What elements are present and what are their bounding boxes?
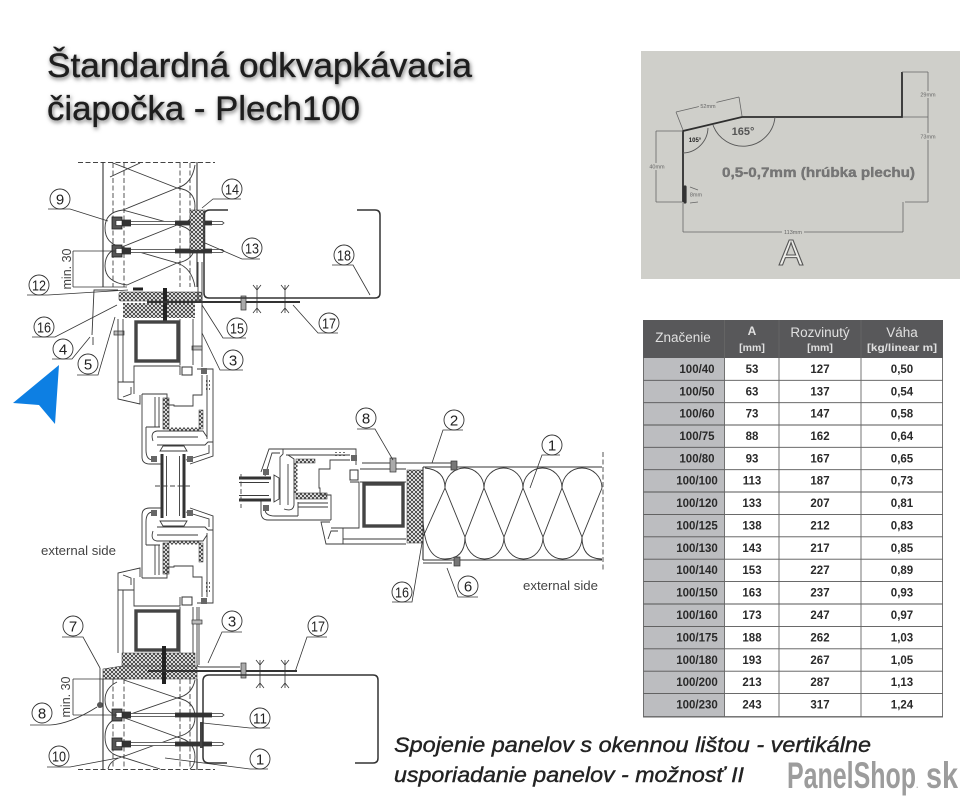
label 3: [202, 333, 243, 370]
label 10: [47, 746, 118, 767]
table rows: 100/175: [676, 632, 718, 644]
table rows: 0,64: [891, 431, 914, 443]
arrow: blue pointer: [13, 365, 59, 424]
table rows: 0,50: [891, 364, 913, 376]
dimension: lower min.30: [59, 676, 125, 718]
label 11: 11: [253, 710, 267, 728]
table rows: 247: [810, 610, 830, 622]
title: [47, 47, 472, 128]
table rows: 317: [810, 700, 830, 712]
dimension 113mm: 113mm: [784, 230, 802, 236]
table rows: 73: [746, 409, 758, 421]
table rows: 162: [810, 431, 830, 443]
technical drawing: horizontal section: [239, 408, 603, 602]
table rows: 0,73: [891, 476, 913, 488]
label 16: 16: [395, 584, 409, 602]
table rows: 100/50: [679, 386, 715, 398]
upper fasteners: [112, 217, 224, 257]
table rows: 100/230: [676, 700, 718, 712]
dimension 29mm: 29mm: [920, 92, 936, 98]
table rows: 100/200: [676, 677, 718, 689]
table rows: 138: [742, 520, 762, 532]
label 1: 1: [548, 438, 556, 454]
table rows: 0,81: [891, 498, 914, 510]
table rows: 1,05: [891, 655, 914, 667]
label 12: 12: [32, 278, 46, 294]
table rows: 0,89: [891, 565, 913, 577]
table rows: 262: [810, 632, 830, 644]
table rows: 188: [742, 632, 762, 644]
table rows: 100/160: [676, 610, 718, 622]
table rows: 100/125: [676, 520, 718, 532]
header labels: [kg/linear m]: [867, 342, 937, 354]
table rows: 53: [746, 364, 758, 376]
table rows: 237: [810, 588, 830, 600]
angle 105: 105°: [689, 138, 702, 144]
table rows: 217: [810, 543, 830, 555]
logo: PanelShop: [787, 755, 916, 796]
first column shading: [643, 358, 724, 717]
table rows: 100/150: [676, 588, 718, 600]
dimension 52mm text: 52mm: [700, 104, 716, 110]
label 7: 7: [69, 618, 77, 636]
label 15: 15: [230, 320, 244, 338]
table rows: 63: [746, 386, 758, 398]
label 18: 18: [337, 248, 351, 264]
table rows: 100/80: [679, 453, 715, 465]
label 8: [356, 408, 393, 460]
table rows: 113: [743, 476, 761, 488]
logo: sk: [926, 755, 958, 796]
dimension 40mm background: [648, 163, 666, 170]
label: external side right: external side: [523, 579, 598, 593]
label 17: 17: [322, 316, 336, 332]
label 17 lower: 17: [311, 618, 325, 636]
table rows: 1,03: [891, 632, 913, 644]
table rows: 0,83: [891, 520, 913, 532]
table rows: 1,13: [891, 677, 913, 689]
label 17 lower: [295, 616, 328, 672]
label 15: [202, 305, 247, 338]
title: Štandardná odkvapkávacia: [47, 47, 472, 85]
label 16: [392, 543, 422, 602]
dimension 40mm: 40mm: [649, 164, 665, 170]
header labels: A: [748, 324, 757, 338]
header labels: [mm]: [807, 342, 833, 354]
table rows: 212: [810, 520, 830, 532]
table rows: 267: [810, 655, 830, 667]
label 4: 4: [59, 342, 67, 358]
table rows: 287: [810, 677, 830, 689]
header labels: [655, 324, 937, 354]
glazing centre mark: [155, 485, 192, 487]
label 1 lower: 1: [256, 752, 264, 768]
technical drawing: vertical section: [27, 162, 380, 770]
dimension: upper min.30: min. 30: [60, 248, 74, 290]
label 1: [530, 435, 562, 488]
dimension 29mm background: [919, 91, 937, 98]
upper sealing strips: [119, 210, 205, 327]
table rows: 0,58: [891, 409, 914, 421]
angle 165: 165°: [732, 126, 754, 138]
lower flashing: [203, 675, 378, 763]
profile line: [683, 72, 902, 202]
upper window section: [118, 319, 213, 486]
table rows: 127: [810, 364, 830, 376]
letter A: A: [779, 232, 803, 273]
table rows: 133: [742, 498, 762, 510]
label 2: [432, 410, 464, 463]
dimension: upper min.30: [60, 248, 127, 290]
lower fasteners: [112, 709, 224, 750]
table rows: 100/130: [676, 543, 718, 555]
hatch seal: [407, 470, 423, 543]
label 7: [62, 616, 100, 668]
label 9: 9: [56, 192, 64, 208]
table rows: 0,93: [891, 588, 913, 600]
lower trim plates: [97, 607, 297, 708]
table rows: 0,85: [891, 543, 914, 555]
label 18: [332, 245, 370, 295]
label 17: [293, 305, 339, 333]
label 16: [32, 305, 117, 337]
label 3: 3: [229, 352, 237, 370]
lower window section: [118, 486, 213, 653]
label 13: 13: [245, 240, 259, 258]
table rows: 193: [742, 655, 762, 667]
dimension lines: [656, 72, 928, 232]
table rows: 173: [742, 610, 762, 622]
title: čiapočka - Plech100: [47, 90, 360, 128]
caption: usporiadanie panelov - možnosť II: [394, 764, 744, 787]
label 5: 5: [84, 356, 92, 374]
table rows: [676, 364, 914, 712]
table rows: 227: [810, 565, 830, 577]
dimension 52mm: [699, 101, 717, 111]
label 13: [205, 238, 262, 259]
label 3 lower: [208, 611, 242, 663]
label 16: 16: [37, 320, 51, 336]
logo: .: [916, 780, 919, 790]
trim plates: [362, 458, 460, 566]
table rows: 100/120: [676, 498, 718, 510]
label 8 lower: [30, 703, 97, 725]
label 11: [203, 708, 270, 728]
label 8: 8: [362, 410, 370, 428]
label: external side left: external side: [41, 544, 116, 558]
table rows: 143: [742, 543, 762, 555]
label 9: [48, 189, 108, 221]
label 8 lower: 8: [38, 706, 46, 722]
table rows: 100/40: [679, 364, 715, 376]
dimension 8mm: 8mm: [690, 192, 703, 198]
table rows: 0,65: [891, 453, 914, 465]
dimension 113mm background: [782, 229, 804, 235]
lower sealing strips: [103, 646, 197, 684]
header labels: Značenie: [655, 330, 711, 345]
header labels: Rozvinutý: [790, 325, 850, 340]
dimension 73mm background: [919, 133, 937, 140]
table rows: 100/140: [676, 565, 718, 577]
table rows: 207: [810, 498, 830, 510]
table rows: 137: [810, 386, 830, 398]
label 6: [447, 568, 478, 597]
label 14: 14: [225, 182, 239, 198]
table: dimensions: [643, 320, 943, 717]
angle arcs: [683, 117, 775, 153]
thickness note: 0,5-0,7mm (hrúbka plechu): [722, 165, 915, 180]
label 12: [27, 275, 128, 295]
table rows: 0,97: [891, 610, 913, 622]
table rows: 1,24: [891, 700, 914, 712]
label 4: [52, 337, 90, 359]
upper flashing: [204, 210, 380, 298]
caption: [394, 734, 871, 787]
upper wall panel: [78, 162, 215, 287]
label 6: 6: [464, 578, 472, 596]
label 10: 10: [52, 748, 66, 766]
table rows: 0,54: [891, 386, 914, 398]
dimension 73mm: 73mm: [920, 134, 936, 140]
table rows: 163: [742, 588, 762, 600]
label 3 lower: 3: [228, 614, 236, 630]
label 2: 2: [450, 412, 458, 430]
header labels: [mm]: [739, 342, 765, 354]
table rows: 213: [742, 677, 762, 689]
table rows: 187: [810, 476, 830, 488]
sandwich panel: [423, 452, 603, 571]
caption: Spojenie panelov s okennou lištou - vertikálne: [394, 734, 871, 757]
upper trim plates: [92, 262, 300, 367]
header labels: Váha: [886, 325, 918, 340]
glazing end mark: [240, 474, 242, 508]
label 5: [77, 317, 115, 375]
dimension: lower min.30: min. 30: [59, 676, 73, 718]
label 14: [202, 179, 242, 208]
table header: [643, 320, 943, 358]
table rows: 100/180: [676, 655, 718, 667]
window section rotated: [239, 449, 406, 544]
label 1 lower: [165, 749, 270, 769]
table rows: 147: [810, 409, 830, 421]
table rows: 167: [810, 453, 830, 465]
table rows: 88: [746, 431, 759, 443]
table rows: 100/75: [679, 431, 715, 443]
table rows: 153: [742, 565, 762, 577]
table rows: 93: [746, 453, 758, 465]
table rows: 100/100: [676, 476, 718, 488]
table rows: 100/60: [679, 409, 715, 421]
panel: flashing profile drawing: [641, 51, 960, 279]
table rows: 243: [742, 700, 762, 712]
lower wall panel: [78, 679, 215, 770]
